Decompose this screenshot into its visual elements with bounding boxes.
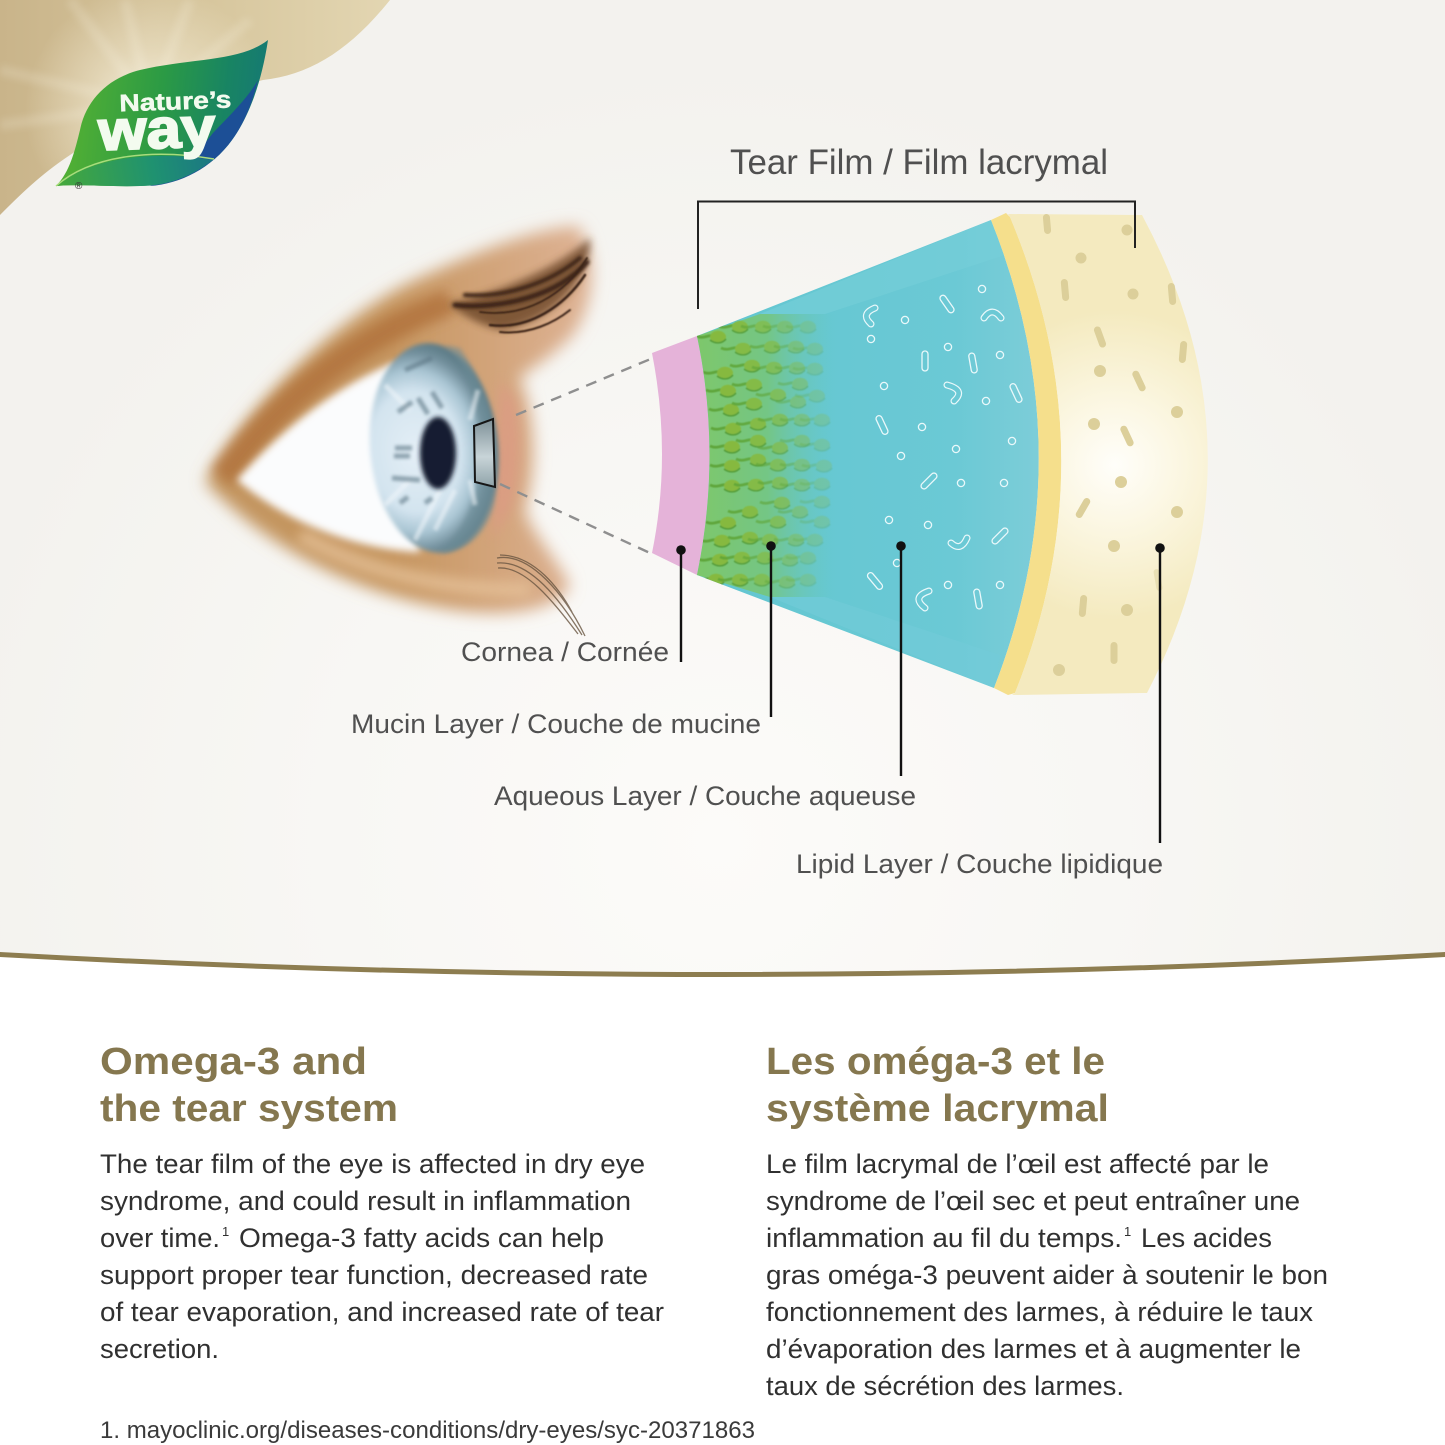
label: lipid layer: Lipid Layer / Couche lipidique (796, 849, 1163, 879)
heading: French: système lacrymal (766, 1088, 1109, 1130)
upper lid shading (222, 302, 450, 478)
body text: French: gras oméga-3 peuvent aider à soutenir le bon (766, 1259, 1328, 1290)
lipid particles (1043, 214, 1187, 676)
label: mucin layer: Mucin Layer / Couche de mucine (351, 709, 761, 739)
lower lid highlight (300, 535, 530, 590)
label: mucin layer (351, 541, 776, 739)
body text: French (766, 1148, 1328, 1401)
pupil (420, 417, 456, 489)
eye illustration (205, 226, 592, 636)
heading: English: the tear system (100, 1088, 398, 1130)
aqueous particles (866, 285, 1023, 609)
body text: English: secretion. (100, 1333, 219, 1364)
aqueous layer (697, 220, 1039, 688)
dashed zoom lines (500, 358, 653, 553)
cornea layer (652, 336, 710, 575)
heading: English: Omega-3 and (100, 1041, 367, 1083)
eye skin (205, 226, 592, 613)
heading: French: Les oméga-3 et le (766, 1041, 1105, 1083)
yellow boundary band (991, 213, 1061, 695)
label: cornea: Cornea / Cornée (461, 637, 669, 667)
body text: French: syndrome de l’œil sec et peut entraîner une (766, 1185, 1300, 1216)
iris dark rim (440, 345, 497, 553)
body text: English: support proper tear function, decreased rate (100, 1259, 648, 1290)
body text: French: d’évaporation des larmes et à augmenter le (766, 1333, 1301, 1364)
body text: English: syndrome, and could result in inflammation (100, 1185, 631, 1216)
tear film cone diagram (652, 213, 1208, 695)
body text: English: 1 (222, 1224, 229, 1239)
label: aqueous layer: Aqueous Layer / Couche aqueuse (494, 781, 916, 811)
body text: English: of tear evaporation, and increased rate of tear (100, 1296, 664, 1327)
body text: English: Omega-3 fatty acids can help (239, 1222, 604, 1253)
title: Tear Film bracket (698, 143, 1135, 309)
body text: English (100, 1148, 664, 1364)
logo wordmark: way (96, 95, 216, 162)
mucin molecules (694, 321, 832, 588)
label: lipid layer (796, 543, 1165, 879)
upper lashes (455, 258, 587, 332)
body text: English: over time. (100, 1222, 220, 1253)
body text: French: fonctionnement des larmes, à réduire le taux (766, 1296, 1313, 1327)
sclera (237, 362, 420, 552)
label: aqueous layer (494, 541, 916, 811)
inner face highlight (492, 380, 519, 540)
body text: French: taux de sécrétion des larmes. (766, 1370, 1124, 1401)
logo: Nature's Way leaf (56, 40, 268, 192)
iris (361, 338, 507, 558)
lower lashes (497, 555, 585, 636)
body text: French: Le film lacrymal de l’œil est affecté par le (766, 1148, 1269, 1179)
title: Tear Film bracket: Tear Film / Film lacrymal (730, 143, 1108, 182)
label: cornea (461, 545, 686, 667)
body text: English: The tear film of the eye is affected in dry eye (100, 1148, 645, 1179)
cornea selection box (474, 419, 495, 487)
body text: French: 1 (1124, 1224, 1131, 1239)
body text: French: inflammation au fil du temps. (766, 1222, 1122, 1253)
mucin layer green band (697, 314, 835, 597)
body text: French: Les acides (1141, 1222, 1272, 1253)
lipid layer (1008, 214, 1208, 695)
heading: French (766, 1041, 1109, 1130)
iris pale streaks (385, 385, 478, 540)
upper lash mass (448, 238, 590, 330)
heading: English (100, 1041, 398, 1130)
logo wordmark (96, 87, 233, 162)
tan corner with sun rays (0, 0, 400, 220)
footnote: 1. mayoclinic.org/diseases-conditions/dry-eyes/syc-20371863 (100, 1418, 755, 1444)
divider curve (0, 952, 1445, 977)
iris upper reflection (392, 358, 442, 503)
logo wordmark: Nature’s (119, 87, 232, 117)
registered mark: ® (75, 181, 83, 192)
